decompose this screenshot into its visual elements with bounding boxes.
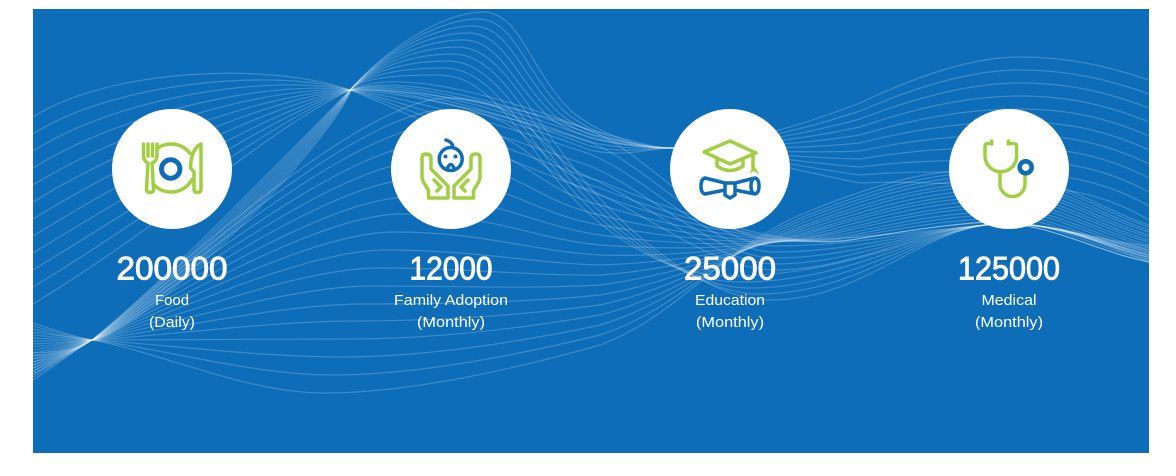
- icon: stethoscope: [985, 141, 1032, 196]
- label: food daily: Food: [155, 292, 189, 309]
- label: medical monthly: Medical: [982, 292, 1036, 309]
- label: food daily: (Daily): [149, 314, 195, 331]
- icon circle: medical: [949, 109, 1069, 229]
- label: education monthly: (Monthly): [696, 314, 764, 331]
- stat: food: [112, 109, 232, 331]
- label: medical monthly: (Monthly): [975, 314, 1043, 331]
- stat: education: [670, 109, 790, 331]
- number: 12000: 12000: [410, 250, 492, 286]
- icon: plate with fork and knife: [144, 144, 201, 192]
- label: education monthly: [695, 292, 765, 331]
- icon: baby held by hands: [422, 140, 480, 198]
- stat: family adoption: [391, 109, 511, 331]
- number: 200000: 200000: [116, 250, 228, 286]
- label: medical monthly: [975, 292, 1043, 331]
- stat: medical: [949, 109, 1069, 331]
- number: 25000: 25000: [684, 250, 776, 286]
- number: 125000: 125000: [958, 250, 1060, 286]
- icon circle: education: [670, 109, 790, 229]
- icon circle: food: [112, 109, 232, 229]
- icon: graduation cap and diploma: [701, 141, 760, 198]
- label: education monthly: Education: [695, 292, 765, 309]
- label: food daily: [149, 292, 195, 331]
- label: family adoption monthly: [394, 292, 508, 331]
- label: family adoption monthly: Family Adoption: [394, 292, 508, 309]
- label: family adoption monthly: (Monthly): [417, 314, 485, 331]
- icon circle: family adoption: [391, 109, 511, 229]
